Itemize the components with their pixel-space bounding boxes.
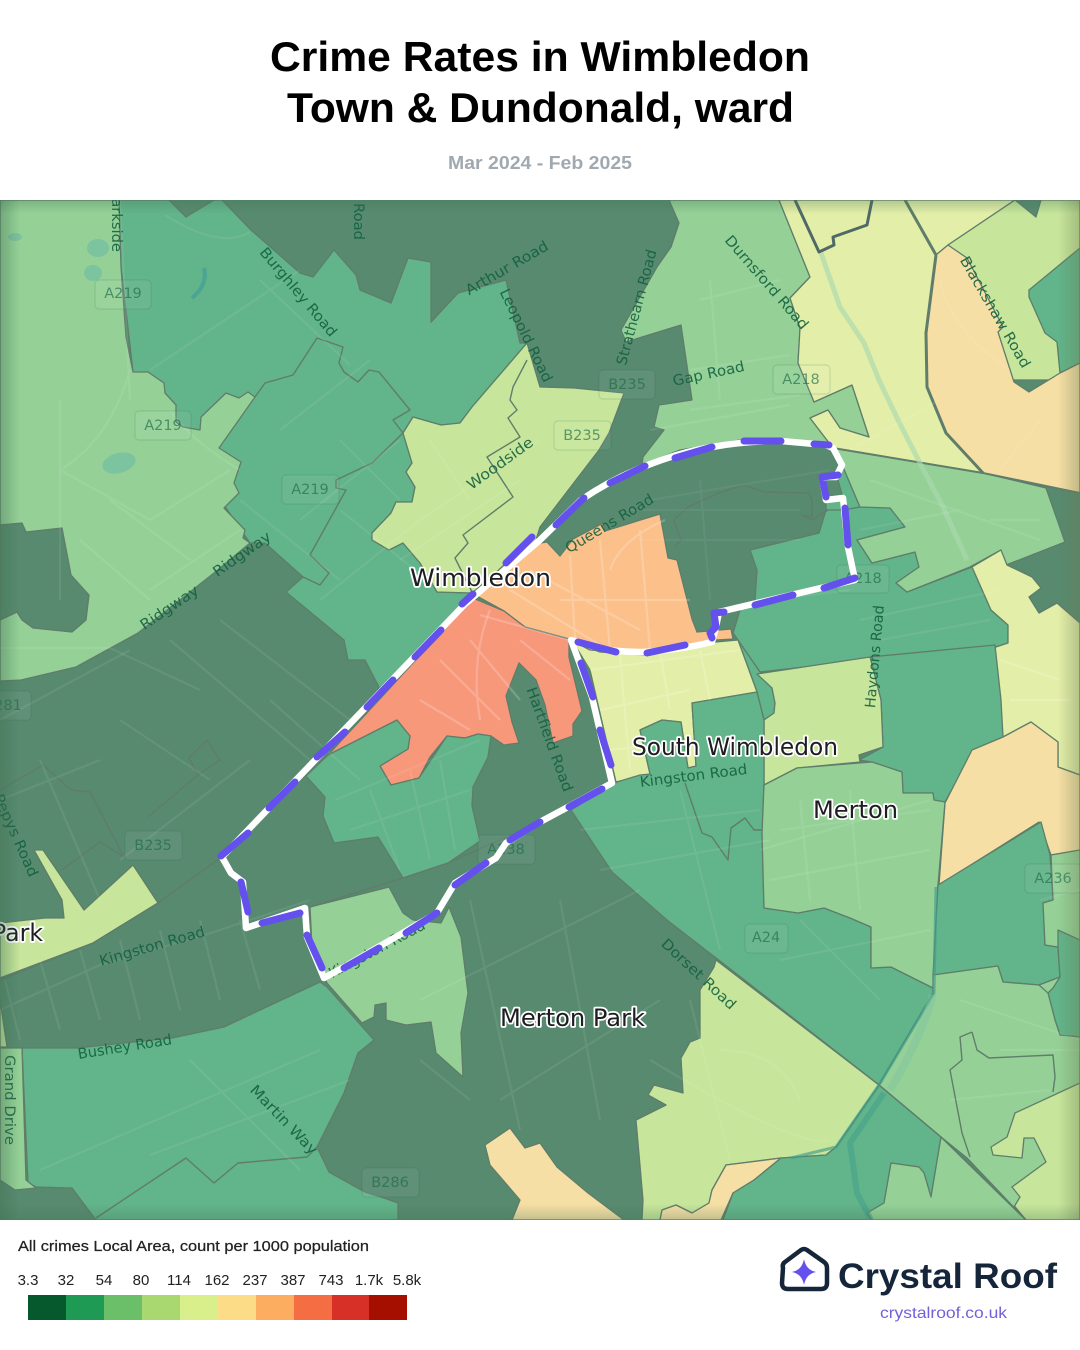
- road name labels: Road: [350, 203, 366, 240]
- title: Town & Dundonald, ward: [287, 84, 794, 131]
- icon: house with star: [782, 1249, 827, 1289]
- road number badges: B235: [134, 838, 172, 854]
- road name labels: Dorset Road: [658, 936, 739, 1013]
- logo: Crystal Roof: [782, 1249, 1057, 1322]
- road number badges: A218: [844, 571, 882, 587]
- road number badges: A219: [291, 482, 329, 498]
- legend scale values: 162: [204, 1272, 230, 1289]
- title: Crime Rates in Wimbledon: [270, 33, 810, 80]
- road number badges: B235: [608, 377, 646, 393]
- road name labels: Kingston Road: [639, 762, 748, 791]
- legend scale values: 54: [96, 1272, 112, 1289]
- road number badges: A238: [487, 842, 525, 858]
- legend scale values: [18, 1272, 422, 1289]
- ponds in the common: [8, 233, 205, 477]
- road name labels: Blackshaw Road: [956, 254, 1033, 371]
- road name labels: Grand Drive: [1, 1055, 17, 1145]
- road name labels: [0, 190, 1033, 1159]
- map edge vignette: [0, 200, 1080, 1220]
- subtitle: date range: Mar 2024 - Feb 2025: [448, 153, 632, 173]
- legend title: All crimes Local Area, count per 1000 population: [18, 1238, 369, 1255]
- road name labels: Parkside: [108, 190, 124, 252]
- legend scale values: 237: [242, 1272, 268, 1289]
- road number badges: A24: [752, 930, 780, 946]
- rivers and canals: [791, 253, 967, 1220]
- place labels: Wimbledon: [410, 564, 551, 592]
- road name labels: Martin Way: [246, 1082, 321, 1159]
- place labels: Merton: [813, 796, 898, 824]
- road name labels: Gap Road: [671, 359, 746, 390]
- road number badges: A236: [1034, 871, 1072, 887]
- road name labels: Arthur Road: [463, 239, 552, 299]
- road name labels: Ridgway: [138, 583, 202, 634]
- legend scale values: 5.8k: [393, 1272, 422, 1289]
- road name labels: Haydons Road: [863, 605, 888, 709]
- street network: [0, 200, 1080, 1170]
- road name labels: Leopold Road: [496, 286, 555, 385]
- road number badges: A218: [782, 372, 820, 388]
- road name labels: Burghley Road: [256, 245, 339, 340]
- legend scale values: 3.3: [18, 1272, 38, 1289]
- road name labels: Woodside: [464, 435, 537, 493]
- road name labels: Bushey Road: [77, 1032, 173, 1063]
- title: [270, 33, 810, 131]
- ward boundary: dashed purple on white: [221, 441, 855, 978]
- legend scale values: 32: [58, 1272, 74, 1289]
- road name labels: Hartfield Road: [522, 685, 575, 794]
- road name labels: Queens Road: [563, 492, 657, 557]
- road name labels: Ridgway: [210, 529, 275, 581]
- road number badges: A219: [144, 418, 182, 434]
- road number badges: B286: [371, 1175, 409, 1191]
- map areas by crime rate: [0, 200, 1080, 1220]
- brand name: Crystal Roof: [838, 1257, 1057, 1296]
- road name labels: Kingston Road: [98, 924, 207, 970]
- panel: choropleth map: [0, 190, 1080, 1220]
- place labels: Merton Park: [500, 1004, 645, 1032]
- place labels: [0, 564, 898, 1032]
- website: crystalroof.co.uk: [880, 1305, 1008, 1322]
- road number badges: [0, 280, 1080, 1197]
- legend scale values: 114: [167, 1272, 191, 1289]
- road name labels: Kingston Road: [326, 918, 428, 982]
- legend scale values: 1.7k: [355, 1272, 384, 1289]
- legend scale values: 387: [280, 1272, 306, 1289]
- road name labels: Strathearn Road: [614, 248, 661, 367]
- road number badges: B235: [563, 428, 601, 444]
- road number badges: A219: [104, 286, 142, 302]
- legend colour swatches: [28, 1295, 407, 1320]
- legend scale values: 743: [318, 1272, 344, 1289]
- area boundary lines: [0, 200, 1080, 1220]
- legend: colour scale: [18, 1272, 422, 1320]
- legend scale values: 80: [133, 1272, 149, 1289]
- road name labels: Durnsford Road: [721, 233, 811, 333]
- place labels: South Wimbledon: [632, 733, 838, 761]
